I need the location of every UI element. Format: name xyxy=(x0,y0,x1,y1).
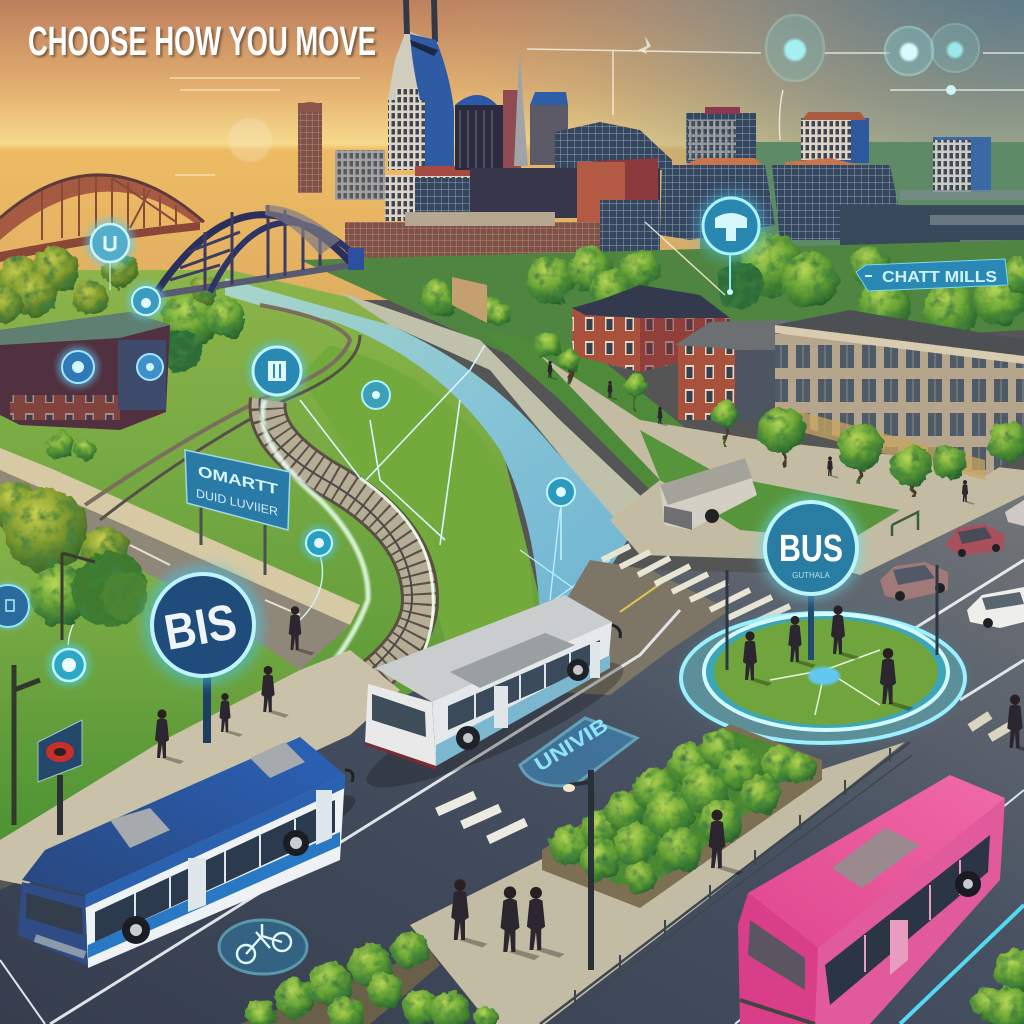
brick building xyxy=(572,285,730,372)
red car xyxy=(945,524,1005,557)
road base xyxy=(0,485,1024,1024)
bench xyxy=(892,512,918,536)
glowing road label xyxy=(520,714,637,786)
pin: bridge foot xyxy=(127,282,165,320)
lower left sidewalk xyxy=(0,650,400,885)
pink bus xyxy=(738,775,1005,1024)
road sign OMARTT: OMARTT xyxy=(198,463,279,499)
pin: T icon xyxy=(696,191,766,295)
street trees xyxy=(488,303,1024,498)
planter base xyxy=(542,724,822,908)
network lines in sky xyxy=(527,49,1024,295)
skyline: batman tower xyxy=(385,0,485,221)
crosswalk stripes xyxy=(602,546,790,626)
pin: rail side xyxy=(301,525,337,561)
left green ground xyxy=(0,270,545,840)
right crosswalk xyxy=(970,715,1010,738)
left tree cluster xyxy=(0,246,245,372)
BIS sign xyxy=(143,565,263,743)
white bus xyxy=(356,595,634,808)
street lamp left xyxy=(62,553,95,640)
railway track xyxy=(85,305,420,700)
lower left lawn road xyxy=(0,448,360,830)
CHATT MILLS label: CHATT MILLS xyxy=(882,269,997,286)
pin: lower left xyxy=(47,643,91,687)
tree line behind buildings xyxy=(421,233,1024,338)
top right car xyxy=(1005,500,1024,526)
sky background xyxy=(0,0,1024,300)
pin: sky twin circles xyxy=(885,24,979,95)
bottom bush planter base xyxy=(240,950,440,1024)
pin: building right xyxy=(137,354,163,380)
skyline: central towers xyxy=(455,48,672,170)
BIS sign: BIS xyxy=(160,593,241,661)
pin: river xyxy=(547,478,575,560)
left pole xyxy=(14,665,40,825)
pin: building left xyxy=(57,346,99,388)
large beige building xyxy=(775,310,1024,480)
river xyxy=(225,278,640,615)
brick tower xyxy=(298,102,322,193)
glowing road label: UNIVIB xyxy=(531,714,612,776)
left building xyxy=(0,312,170,430)
street lamp xyxy=(563,770,594,970)
road sign OMARTT xyxy=(185,450,290,575)
bicycle lane icon xyxy=(219,920,307,974)
planter bushes xyxy=(548,730,816,895)
people in roundabout xyxy=(743,605,913,711)
title xyxy=(28,18,378,66)
foreground crosswalk xyxy=(437,795,526,840)
skyline: right office towers xyxy=(660,107,1024,270)
skyline: dark base block xyxy=(345,158,660,277)
BUS sign: BUS xyxy=(779,528,843,570)
central lawn xyxy=(300,345,534,660)
parked camper vehicle xyxy=(660,458,757,530)
blue bus xyxy=(18,737,365,968)
grey car xyxy=(880,562,948,601)
glowing route lines xyxy=(68,345,610,700)
streetlight poles around roundabout xyxy=(727,565,937,670)
title: CHOOSE HOW YOU MOVE xyxy=(28,18,376,64)
small tan building by the river xyxy=(452,277,487,323)
central tan road xyxy=(520,560,730,695)
blue arch bridge xyxy=(155,205,364,298)
bottom bushes xyxy=(245,932,1024,1024)
red arch bridge xyxy=(0,175,204,262)
BUS sign: GUTHALA xyxy=(792,571,831,580)
road sign OMARTT: DUID LUVIIER xyxy=(196,486,278,519)
small brick block xyxy=(675,320,790,422)
plaza fence xyxy=(540,742,912,1024)
left red stop sign xyxy=(38,720,82,835)
CHATT MILLS label xyxy=(856,259,1008,291)
right bank lawn xyxy=(480,330,700,500)
left foreground trees xyxy=(0,431,149,628)
river retaining wall xyxy=(340,292,645,530)
roundabout xyxy=(681,613,965,743)
right sidewalk and lawn xyxy=(540,355,1024,575)
people on paths xyxy=(155,361,1024,960)
road lane markings xyxy=(0,560,1024,1024)
faint sun icon xyxy=(228,118,272,162)
pin: sky outline large xyxy=(766,15,824,81)
title: CHOOSE HOW YOU MOVE xyxy=(30,20,378,66)
white car xyxy=(967,587,1024,628)
road centre marking xyxy=(620,570,680,612)
pin: rail top xyxy=(247,341,307,401)
pin: lawn centre xyxy=(362,381,390,409)
skyline: left mid building xyxy=(335,150,385,200)
pin: bridge top xyxy=(85,218,135,290)
pedestrian plaza xyxy=(410,742,905,1024)
pin: left edge xyxy=(0,582,32,630)
BUS sign xyxy=(759,496,863,660)
right lawn strip behind city xyxy=(300,240,1024,360)
pin: sparkle xyxy=(638,36,651,54)
